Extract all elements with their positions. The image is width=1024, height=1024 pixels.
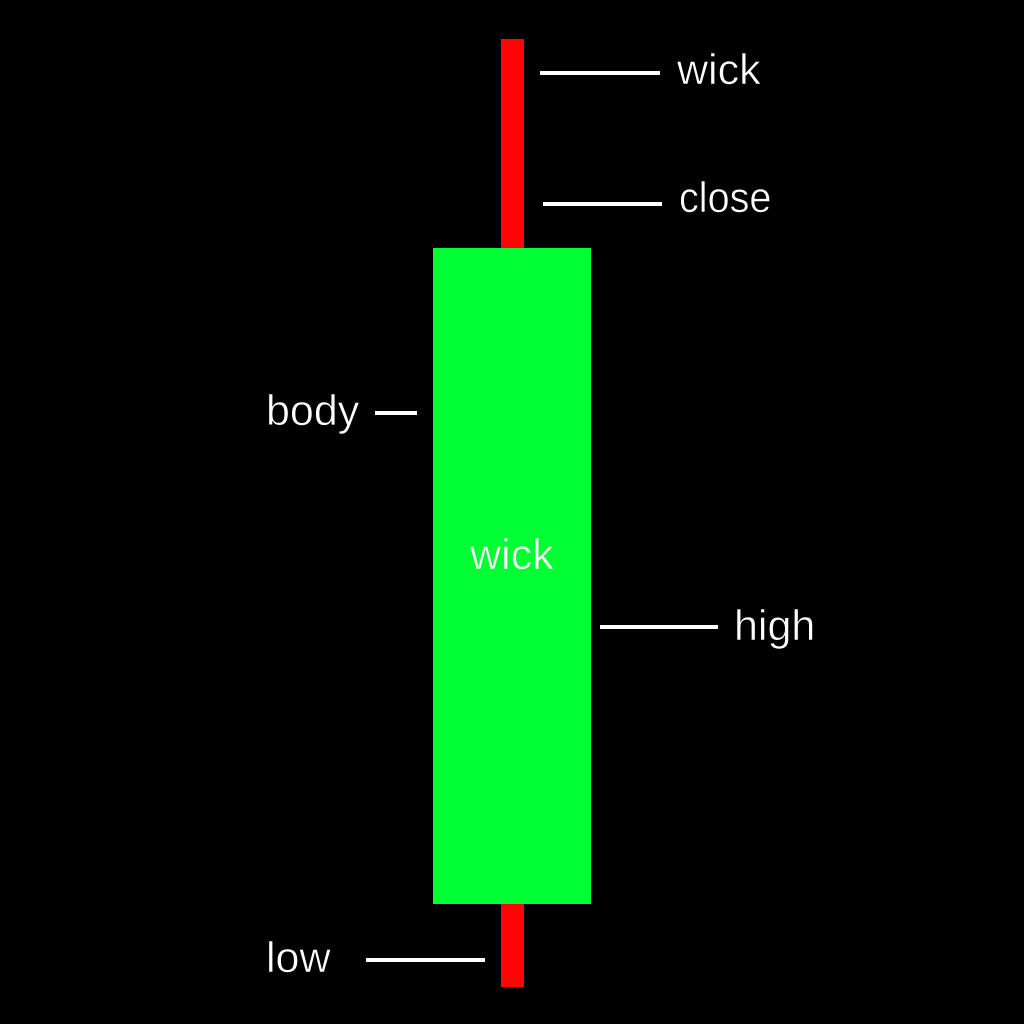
label: wick top [540,46,761,94]
label: close [543,174,771,222]
label: wick top: wick [677,46,761,94]
label: high [600,602,815,650]
label: high: high [734,602,815,650]
candle body [433,248,591,904]
upper wick [501,39,524,249]
label: low [266,934,485,982]
label: body [266,387,417,435]
lower wick [501,903,524,987]
label: wick inside body: wick [470,531,554,579]
label: body: body [266,387,359,435]
label: close: close [679,174,771,222]
label: low: low [266,934,331,982]
